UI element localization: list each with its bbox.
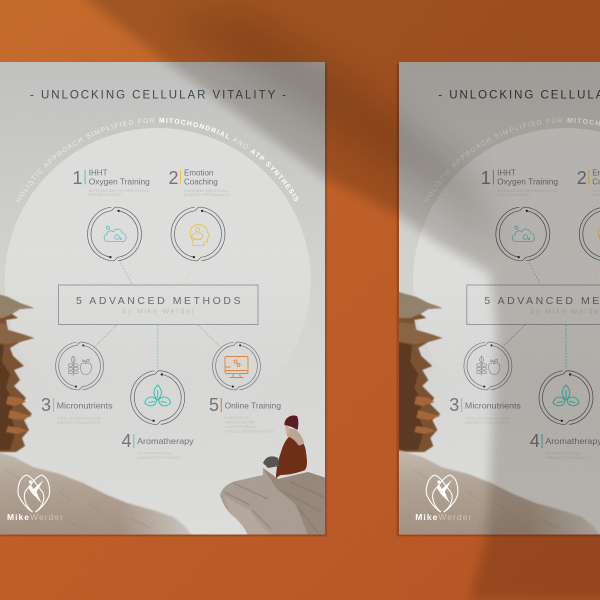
method 3: micronutrients: VITAL NUTRIENTS FOR bbox=[57, 416, 101, 420]
method 4: aromatherapy: Aromatherapy bbox=[137, 437, 194, 446]
method 3 bbox=[449, 342, 521, 425]
method 2: emotion coaching bbox=[168, 168, 231, 261]
method 4: CALMING THROUGH bbox=[545, 452, 581, 456]
method 2: emotion coaching: BLOCKS FOR BALANCE bbox=[184, 193, 231, 197]
curved subtitle: HOLISTIC APPROACH SIMPLIFIED FOR MITOCHONDRIAL AND ATP SYNTHESIS bbox=[16, 118, 299, 202]
method 1: 1 bbox=[481, 168, 491, 188]
dashed connector lines bbox=[504, 262, 600, 369]
poster paper bbox=[399, 62, 600, 535]
logo: Mike Werder: MikeWerder bbox=[7, 512, 63, 522]
central box: 5 advanced methods: 5 ADVANCED METHODS bbox=[76, 295, 240, 307]
method 4: aromatherapy: 4 bbox=[122, 431, 132, 451]
method 4: aromatherapy bbox=[122, 371, 194, 460]
method 1: IHHT oxygen training: Oxygen Training bbox=[89, 177, 150, 186]
title: - UNLOCKING CELLULAR VITALITY - bbox=[30, 90, 286, 102]
method 2: emotion coaching: 2 bbox=[168, 168, 179, 188]
poster: right (partially cropped) bbox=[399, 62, 600, 534]
logo: MikeWerder bbox=[415, 512, 471, 522]
pale semi-circle backdrop bbox=[5, 128, 310, 310]
method 1: FOR MORE ENERGY bbox=[497, 193, 531, 197]
method 3: 3 bbox=[449, 395, 459, 415]
method 3: ENERGY PRODUCTION bbox=[465, 421, 510, 425]
method 5: online training: KNOWLEDGE AND bbox=[225, 420, 255, 424]
central box bbox=[467, 285, 600, 324]
method 5: online training: Online Training bbox=[225, 402, 281, 411]
method 3: micronutrients: 3 bbox=[41, 395, 51, 415]
method 3: micronutrients: ENERGY PRODUCTION bbox=[57, 421, 101, 425]
method 1: ALTERNATING OXYGEN LEVELS bbox=[497, 189, 558, 193]
method 1: IHHT oxygen training: FOR MORE ENERGY bbox=[89, 193, 123, 197]
method 1: IHHT bbox=[497, 169, 516, 178]
method 4: aromatherapy: CALMING THROUGH bbox=[137, 452, 173, 456]
method 1: Oxygen Training bbox=[497, 177, 558, 186]
photo: cliff bottom right bbox=[220, 468, 326, 535]
poster paper bbox=[0, 62, 325, 535]
poster: left bbox=[0, 62, 325, 534]
method 2: 2 bbox=[577, 168, 587, 188]
method 5: online training: 5 bbox=[209, 395, 219, 415]
method 2 bbox=[577, 168, 600, 261]
method 1: IHHT oxygen training: ALTERNATING OXYGEN LEVELS bbox=[89, 189, 150, 193]
method 2: emotion coaching: CLEARING EMOTIONAL bbox=[184, 189, 229, 193]
method 3: VITAL NUTRIENTS FOR bbox=[465, 416, 510, 420]
method 1: IHHT oxygen training bbox=[72, 168, 150, 261]
method 5: online training: CONSOLIDATE bbox=[225, 416, 249, 420]
pale semi-circle backdrop bbox=[413, 128, 600, 310]
method 4: aromatherapy: AROMAS FOR VITALITY bbox=[137, 456, 183, 460]
method 3: micronutrients bbox=[41, 342, 113, 425]
method 2: emotion coaching: Coaching bbox=[184, 177, 218, 186]
method 4: 4 bbox=[530, 431, 540, 451]
method 1: IHHT oxygen training: IHHT bbox=[89, 169, 108, 178]
photo: seated woman in red hat bbox=[263, 415, 307, 478]
photo: tree on left edge bbox=[0, 292, 34, 452]
method 4: AROMAS FOR VITALITY bbox=[545, 456, 592, 460]
central box: 5 advanced methods bbox=[58, 285, 258, 324]
method 4: Aromatherapy bbox=[545, 437, 600, 446]
method 3: micronutrients: Micronutrients bbox=[57, 402, 113, 411]
method 3: Micronutrients bbox=[465, 402, 521, 411]
poster drop shadows bbox=[0, 64, 600, 536]
photo: tree on left edge bbox=[398, 292, 442, 452]
method 4 bbox=[530, 371, 600, 460]
logo: Mike Werder bbox=[7, 475, 63, 522]
method 2: emotion coaching: Emotion bbox=[184, 169, 213, 178]
method 1: IHHT oxygen training: 1 bbox=[72, 168, 83, 188]
deeper shadow band bbox=[170, 10, 500, 250]
method 5: online training: STRESS INDEPENDENTLY bbox=[225, 430, 275, 434]
photo: rocky hill bbox=[398, 450, 599, 535]
central box: 5 advanced methods: by Mike Werder bbox=[122, 308, 195, 316]
method 1 bbox=[481, 168, 558, 261]
logo bbox=[415, 475, 471, 522]
method 5: online training bbox=[209, 342, 281, 434]
method 5: online training: LEARN TO REDUCE bbox=[225, 425, 257, 429]
photo: rocky hill bottom left bbox=[0, 450, 191, 535]
dashed connector lines bbox=[96, 262, 219, 369]
